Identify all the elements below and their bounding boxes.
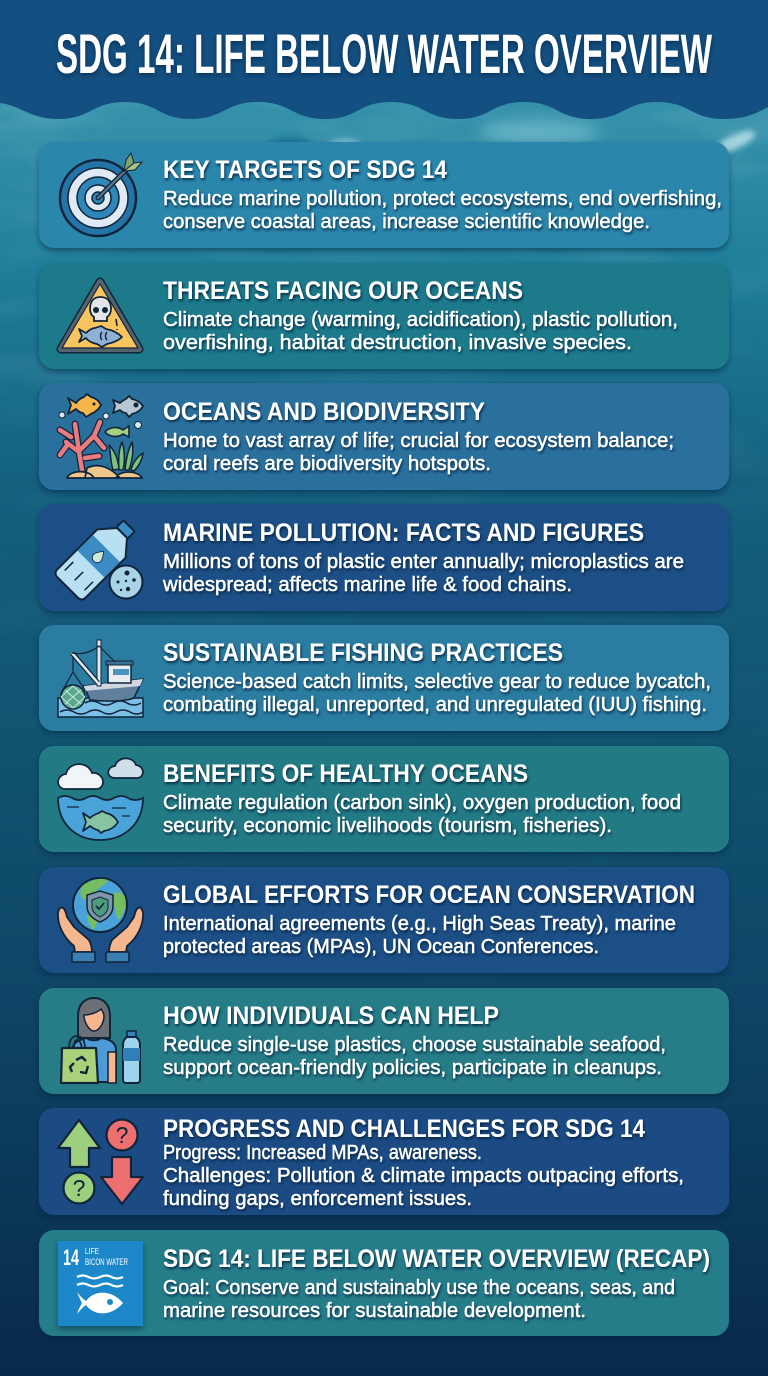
body text [163,670,711,716]
icon: hands holding globe with shield [58,878,143,962]
icon: SDG 14 badge: BICON WATER [85,1257,128,1267]
body text: Reduce single-use plastics, choose sustainable seafood, [163,1033,666,1056]
icon: person with recycling bag and bottle [61,998,140,1083]
panel: benefits [39,746,729,852]
icon: fish, coral and seaweed [59,394,143,478]
body text: security, economic livelihoods (tourism, fisheries). [163,814,612,837]
icon: up and down arrows with question marks: ? [73,1175,85,1201]
body text: protected areas (MPAs), UN Ocean Conferences. [163,935,599,958]
body text: widespread; affects marine life & food chains. [162,573,572,596]
body text: overfishing, habitat destruction, invasive species. [163,331,632,354]
panel: biodiversity [39,383,729,490]
body text: Millions of tons of plastic enter annually; microplastics are [163,550,684,573]
body text [163,1276,675,1322]
icon: target with arrow [60,153,142,236]
icon: up and down arrows with question marks [58,1120,143,1204]
body text: Science-based catch limits, selective gear to reduce bycatch, [163,670,711,693]
body text [163,308,678,354]
icon: plastic bottle and microplastics [53,512,143,602]
icon: fishing boat with net [58,640,143,717]
body text: Progress: Increased MPAs, awareness. [163,1141,482,1164]
icon: clouds and ocean bowl with fish [58,758,143,840]
body text: International agreements (e.g., High Seas Treaty), marine [163,912,676,935]
panel: threats [39,263,729,369]
heading: SUSTAINABLE FISHING PRACTICES [163,639,563,667]
heading: SDG 14: LIFE BELOW WATER OVERVIEW (RECAP) [163,1245,710,1273]
heading: PROGRESS AND CHALLENGES FOR SDG 14 [163,1115,645,1143]
heading: KEY TARGETS OF SDG 14 [163,156,447,184]
heading: GLOBAL EFFORTS FOR OCEAN CONSERVATION [163,881,695,909]
body text [163,791,681,837]
body text [163,1141,684,1210]
body text: Challenges: Pollution & climate impacts outpacing efforts, [163,1164,684,1187]
heading: HOW INDIVIDUALS CAN HELP [163,1002,499,1030]
body text [163,187,722,233]
body text: conserve coastal areas, increase scientific knowledge. [163,210,650,233]
body text: coral reefs are biodiversity hotspots. [163,452,491,475]
panel: key targets [39,142,729,248]
body text: Home to vast array of life; crucial for ecosystem balance; [163,429,674,452]
heading: MARINE POLLUTION: FACTS AND FIGURES [163,519,644,547]
panel: recap [39,1230,729,1336]
body text [163,1033,666,1079]
body text: Goal: Conserve and sustainably use the oceans, seas, and [163,1276,675,1299]
icon: warning triangle with skull and fish [61,282,139,349]
body text: support ocean-friendly policies, participate in cleanups. [163,1056,662,1079]
body text: marine resources for sustainable development. [163,1299,586,1322]
panel: marine pollution [39,504,729,611]
panel: progress and challenges [39,1108,729,1215]
icon: SDG 14 badge: LIFE [85,1247,99,1256]
icon: up and down arrows with question marks: ? [116,1122,128,1148]
body text [162,550,684,596]
body text [163,429,674,475]
body text: funding gaps, enforcement issues. [163,1187,472,1210]
panel: sustainable fishing [39,625,729,731]
heading: OCEANS AND BIODIVERSITY [163,398,485,426]
heading: BENEFITS OF HEALTHY OCEANS [163,760,528,788]
body text: combating illegal, unreported, and unregulated (IUU) fishing. [163,693,707,716]
body text: Climate change (warming, acidification), plastic pollution, [163,308,678,331]
header band with wave edge [0,0,768,119]
panel: global efforts [39,867,729,973]
icon: SDG 14 badge [58,1241,143,1326]
body text: Climate regulation (carbon sink), oxygen production, food [163,791,681,814]
body text [163,912,676,958]
heading: THREATS FACING OUR OCEANS [163,277,523,305]
icon: SDG 14 badge: 14 [63,1245,79,1270]
panel: individuals [39,988,729,1094]
body text: Reduce marine pollution, protect ecosystems, end overfishing, [163,187,722,210]
